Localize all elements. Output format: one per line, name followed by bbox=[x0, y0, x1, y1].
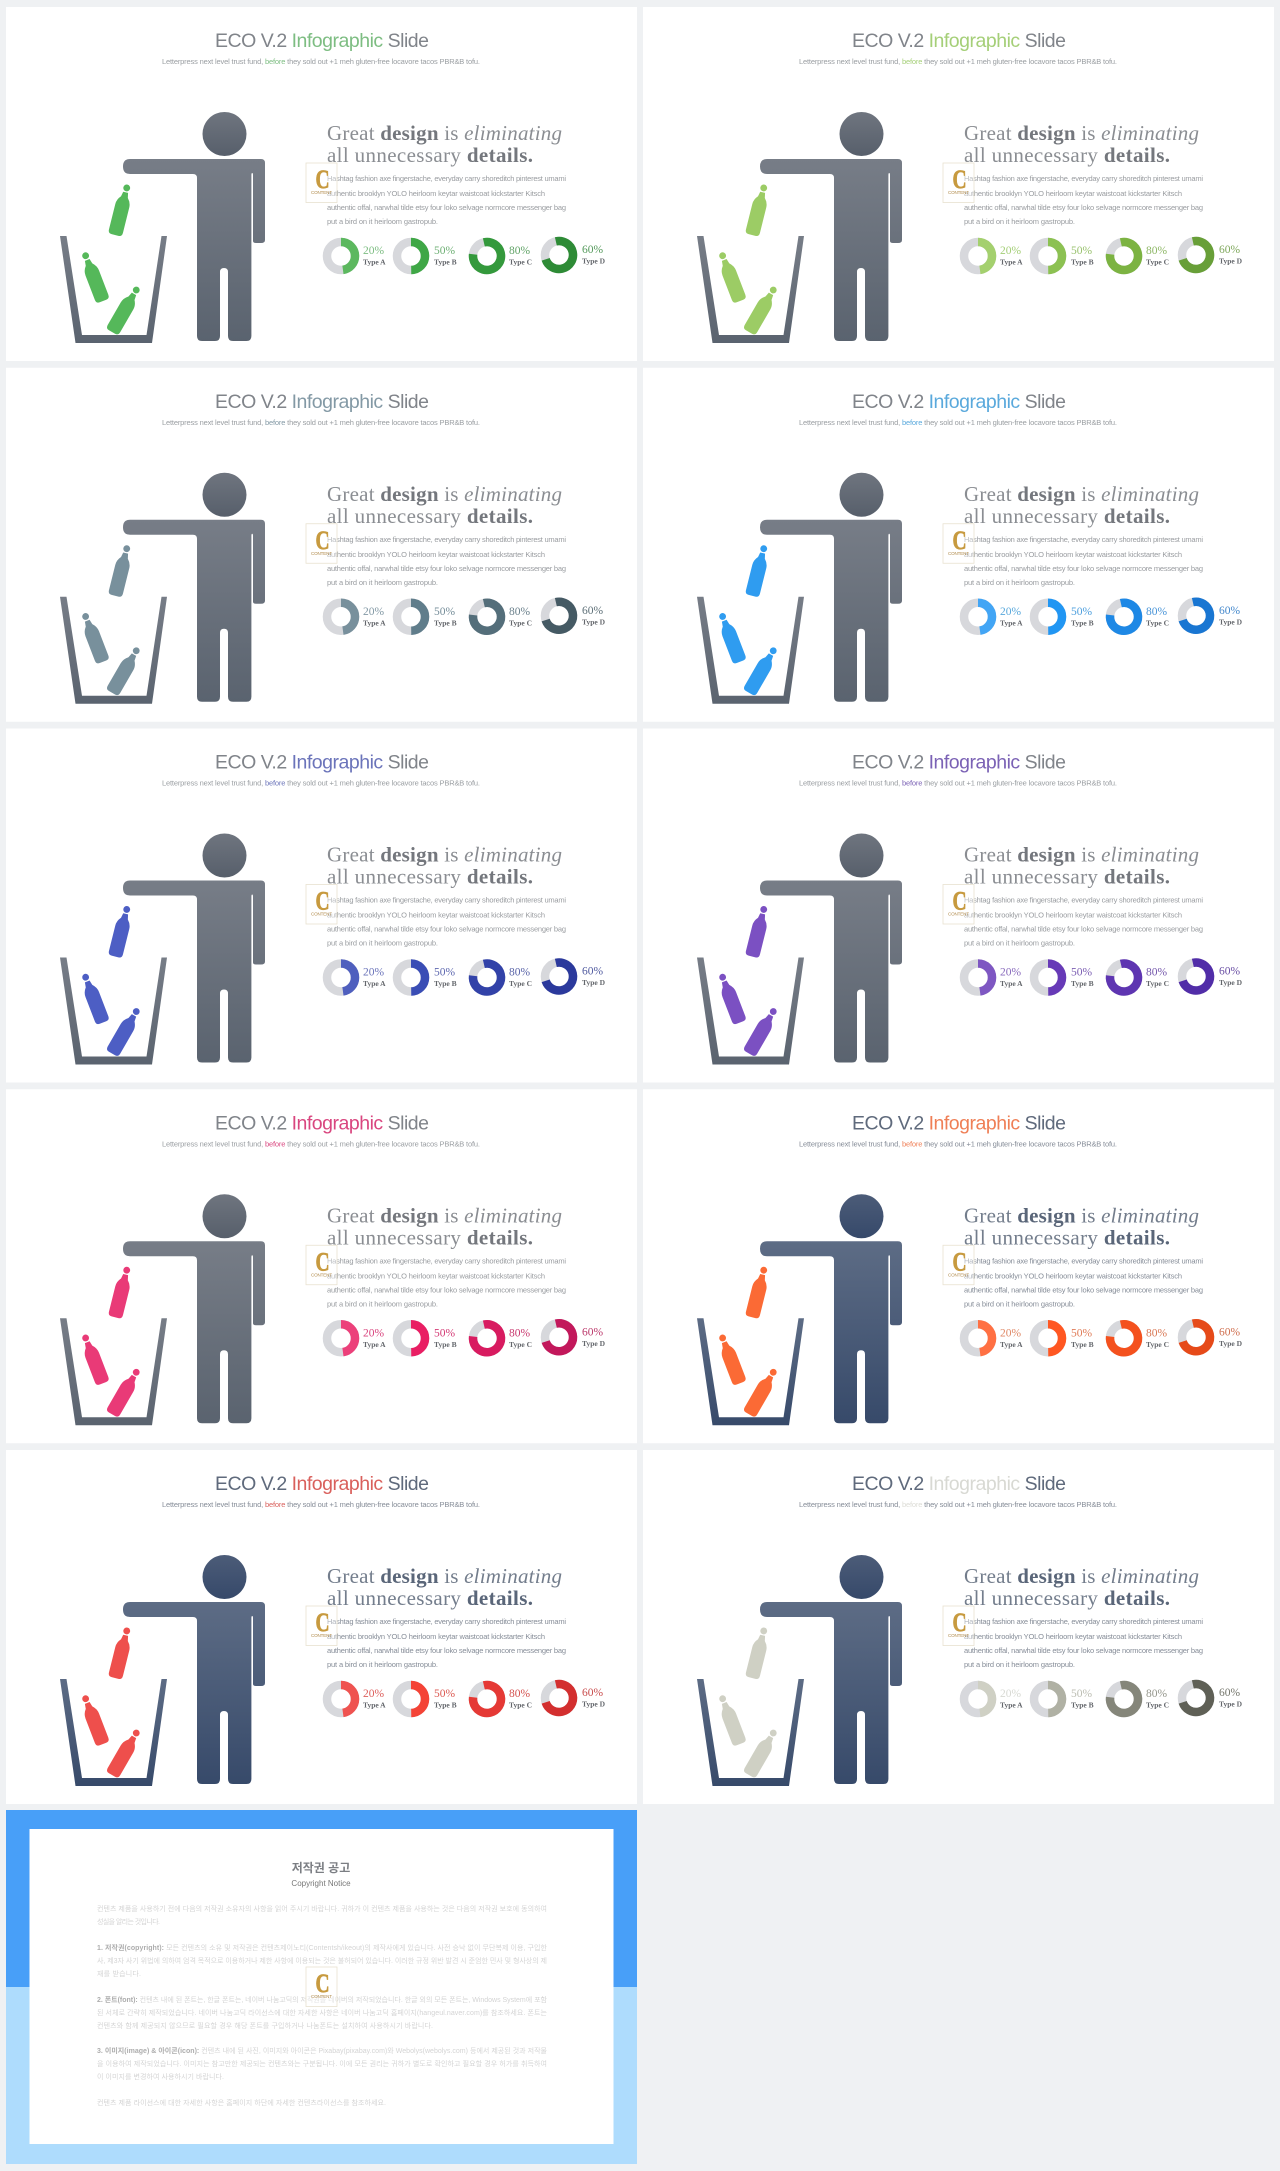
body text: authentic offal, narwhal tilde etsy four loko selvage normcore messenger bag bbox=[964, 924, 1203, 934]
donut: type D bbox=[1179, 1320, 1243, 1354]
body text: Hashtag fashion axe fingerstache, everyday carry shoreditch pinterest umami bbox=[964, 174, 1203, 183]
body text: put a bird on it heirloom gastropub. bbox=[964, 1660, 1075, 1669]
watermark bbox=[306, 1606, 337, 1646]
donut: type D: 60% bbox=[1219, 1326, 1240, 1338]
donut: type D: 60% bbox=[582, 244, 604, 256]
donut: type B bbox=[1034, 603, 1094, 631]
title: ECO V.2 Infographic Slide bbox=[215, 1473, 429, 1495]
notice text: 을 이용하여 제작되었습니다. 이미지는 참고만한 제공되는 컨텐츠와는 구분됩니다. 이에 모든 권리는 귀하가 별도로 확인하고 필요할 경우 허가를 취득하여 bbox=[97, 2059, 547, 2068]
donut: type A: 20% bbox=[1000, 1688, 1022, 1700]
donut: type B bbox=[1034, 964, 1094, 992]
icon: person throwing bottles in bin bbox=[60, 473, 265, 704]
body text bbox=[964, 174, 1203, 226]
watermark bbox=[306, 524, 337, 563]
donut: type A: 20% bbox=[1000, 1327, 1022, 1339]
donut: type B: Type B bbox=[1071, 979, 1094, 988]
donut: type A bbox=[964, 1324, 1023, 1352]
donut: type A: Type A bbox=[363, 979, 386, 988]
donut charts bbox=[327, 1681, 606, 1716]
subtitle: Letterpress next level trust fund, before they sold out +1 meh gluten-free locavore tacos PBR&B tofu. bbox=[162, 1500, 480, 1509]
body text: authentic offal, narwhal tilde etsy four loko selvage normcore messenger bag bbox=[327, 1646, 566, 1655]
donut: type D bbox=[1179, 1681, 1243, 1715]
body text: put a bird on it heirloom gastropub. bbox=[327, 1299, 438, 1308]
donut: type C: Type C bbox=[509, 618, 532, 627]
body text: authentic offal, narwhal tilde etsy four loko selvage normcore messenger bag bbox=[327, 564, 566, 573]
panel: purple slide bbox=[643, 728, 1274, 1082]
body text: authentic brooklyn YOLO heirloom keytar waistcoat kickstarter Kitsch bbox=[964, 189, 1182, 198]
watermark: CONTENT bbox=[948, 912, 969, 916]
body text bbox=[327, 1256, 566, 1308]
watermark: C bbox=[316, 526, 330, 554]
donut: type D: 60% bbox=[582, 1326, 604, 1338]
icon: person throwing bottles in bin bbox=[697, 1555, 902, 1786]
body text: Hashtag fashion axe fingerstache, everyday carry shoreditch pinterest umami bbox=[327, 1617, 566, 1626]
icon: person throwing bottles in bin bbox=[697, 834, 902, 1064]
donut: type D bbox=[542, 960, 606, 993]
headline: Great design is eliminating bbox=[964, 842, 1199, 866]
donut: type B: 50% bbox=[434, 966, 456, 978]
watermark: CONTENT bbox=[311, 1633, 332, 1638]
donut: type B: Type B bbox=[434, 258, 457, 266]
donut: type A bbox=[964, 1685, 1023, 1713]
donut: type A: 20% bbox=[363, 1688, 384, 1700]
panel: indigo slide bbox=[6, 728, 637, 1082]
panel: green slide bbox=[6, 7, 637, 361]
donut: type A: Type A bbox=[363, 1340, 386, 1349]
donut: type A: 20% bbox=[363, 966, 384, 978]
donut: type A: Type A bbox=[363, 258, 386, 266]
donut: type D bbox=[542, 599, 606, 633]
panel: pink slide bbox=[6, 1089, 637, 1443]
body text: authentic brooklyn YOLO heirloom keytar waistcoat kickstarter Kitsch bbox=[327, 1271, 545, 1280]
donut: type A: 20% bbox=[363, 245, 384, 257]
subtitle: Letterpress next level trust fund, before they sold out +1 meh gluten-free locavore tacos PBR&B tofu. bbox=[799, 778, 1117, 788]
donut: type B: 50% bbox=[434, 245, 456, 257]
donut: type C bbox=[1107, 961, 1169, 994]
headline: Great design is eliminating bbox=[964, 482, 1199, 506]
donut: type D: Type D bbox=[1219, 1700, 1243, 1708]
donut: type D: Type D bbox=[582, 1700, 606, 1708]
notice text: 사, 제3자 사기 위법에 의하여 엄격 목적으로 이용하거나 제한 사항에 이용되는 것은 불허되어 있습니다. 이러한 규정 위반 발견 시 준엄한 민사 및 형사상의 제 bbox=[97, 1956, 547, 1965]
notice text bbox=[97, 1904, 548, 2107]
notice text: 컨텐츠 제품 라이선스에 대한 자세한 사항은 홈페이지 하단에 자세한 컨텐츠라이선스를 참조하세요. bbox=[97, 2098, 386, 2107]
body text: Hashtag fashion axe fingerstache, everyday carry shoreditch pinterest umami bbox=[964, 535, 1203, 544]
watermark: C bbox=[316, 1608, 330, 1637]
donut: type B: Type B bbox=[1071, 618, 1094, 627]
donut: type A bbox=[327, 242, 386, 270]
donut: type B: 50% bbox=[1071, 966, 1092, 978]
body text: put a bird on it heirloom gastropub. bbox=[327, 578, 438, 587]
body text bbox=[327, 535, 566, 587]
body text: Hashtag fashion axe fingerstache, everyday carry shoreditch pinterest umami bbox=[964, 896, 1203, 904]
watermark bbox=[306, 1967, 337, 2006]
headline line 2: all unnecessary details. bbox=[964, 1225, 1170, 1249]
panel: red slide bbox=[6, 1450, 637, 1804]
donut: type C: 80% bbox=[1146, 245, 1168, 257]
donut: type A bbox=[327, 603, 386, 631]
subtitle: Letterpress next level trust fund, before they sold out +1 meh gluten-free locavore tacos PBR&B tofu. bbox=[799, 418, 1117, 427]
donut: type A bbox=[327, 1324, 386, 1352]
icon: person throwing bottles in bin bbox=[60, 1194, 265, 1425]
title: ECO V.2 Infographic Slide bbox=[852, 1112, 1066, 1134]
headline line 2: all unnecessary details. bbox=[327, 1586, 533, 1610]
donut: type B: 50% bbox=[434, 606, 456, 618]
watermark bbox=[306, 163, 337, 202]
watermark bbox=[943, 884, 974, 924]
watermark bbox=[306, 1245, 337, 1285]
donut charts bbox=[964, 599, 1243, 634]
donut: type C: Type C bbox=[509, 979, 532, 988]
headline line 2: all unnecessary details. bbox=[964, 1586, 1170, 1610]
body text bbox=[964, 1256, 1203, 1308]
donut: type A: Type A bbox=[363, 1700, 386, 1710]
donut: type D: Type D bbox=[1219, 978, 1243, 987]
donut: type D: 60% bbox=[582, 1687, 604, 1699]
subtitle: Letterpress next level trust fund, before they sold out +1 meh gluten-free locavore tacos PBR&B tofu. bbox=[799, 57, 1117, 66]
body text: authentic offal, narwhal tilde etsy four loko selvage normcore messenger bag bbox=[327, 1285, 566, 1294]
body text: put a bird on it heirloom gastropub. bbox=[327, 1660, 438, 1669]
body text: Hashtag fashion axe fingerstache, everyday carry shoreditch pinterest umami bbox=[327, 174, 566, 183]
donut: type D: Type D bbox=[1219, 617, 1243, 626]
watermark bbox=[943, 163, 974, 202]
watermark: CONTENT bbox=[311, 190, 332, 195]
donut charts bbox=[964, 960, 1243, 994]
donut: type A: 20% bbox=[1000, 966, 1022, 978]
donut: type A: 20% bbox=[363, 606, 384, 618]
donut: type C: 80% bbox=[509, 1327, 530, 1339]
body text: put a bird on it heirloom gastropub. bbox=[964, 217, 1075, 226]
watermark: CONTENT bbox=[311, 912, 332, 916]
watermark: C bbox=[952, 1248, 967, 1276]
body text: authentic offal, narwhal tilde etsy four loko selvage normcore messenger bag bbox=[327, 924, 566, 934]
notice title: 저작권 공고 bbox=[292, 1860, 350, 1875]
headline line 2: all unnecessary details. bbox=[327, 143, 533, 167]
notice text: 재를 받습니다. bbox=[97, 1969, 141, 1978]
panel: orange slide bbox=[643, 1089, 1274, 1443]
body text: Hashtag fashion axe fingerstache, everyday carry shoreditch pinterest umami bbox=[327, 1256, 566, 1265]
donut: type A: Type A bbox=[363, 618, 386, 627]
donut: type C: 80% bbox=[1146, 1688, 1168, 1700]
headline: Great design is eliminating bbox=[327, 842, 562, 866]
watermark: CONTENT bbox=[948, 1272, 969, 1277]
body text: Hashtag fashion axe fingerstache, everyday carry shoreditch pinterest umami bbox=[327, 535, 566, 544]
donut: type A: 20% bbox=[1000, 606, 1022, 618]
body text: Hashtag fashion axe fingerstache, everyday carry shoreditch pinterest umami bbox=[964, 1256, 1203, 1265]
headline: Great design is eliminating bbox=[327, 482, 562, 506]
panel: light green slide bbox=[643, 7, 1274, 361]
headline: Great design is eliminating bbox=[327, 121, 562, 145]
donut: type C bbox=[1107, 1321, 1169, 1355]
donut: type C: Type C bbox=[1146, 1700, 1169, 1710]
panel: copyright notice bbox=[6, 1810, 637, 2164]
headline: Great design is eliminating bbox=[964, 1203, 1199, 1227]
donut: type C bbox=[470, 1682, 532, 1716]
body text: authentic offal, narwhal tilde etsy four loko selvage normcore messenger bag bbox=[964, 1646, 1203, 1655]
donut: type C: 80% bbox=[509, 245, 530, 257]
donut: type B bbox=[1034, 242, 1094, 270]
notice text: 컨텐츠와 함께 제공되지 않으므로 필요할 경우 해당 폰트를 구입하거나 나눔폰트는 설치하여 사용하시기 바랍니다. bbox=[97, 2021, 433, 2030]
donut: type C: Type C bbox=[1146, 1340, 1169, 1349]
donut: type B: 50% bbox=[434, 1327, 456, 1339]
watermark: C bbox=[952, 887, 967, 915]
notice subtitle: Copyright Notice bbox=[291, 1879, 351, 1888]
donut: type A: 20% bbox=[363, 1327, 384, 1339]
body text: authentic brooklyn YOLO heirloom keytar waistcoat kickstarter Kitsch bbox=[964, 910, 1182, 920]
watermark bbox=[943, 1606, 974, 1646]
donut: type B: 50% bbox=[434, 1688, 456, 1700]
title: ECO V.2 Infographic Slide bbox=[215, 391, 429, 413]
donut charts bbox=[327, 238, 606, 273]
donut: type C bbox=[470, 1321, 532, 1355]
icon: person throwing bottles in bin bbox=[697, 473, 902, 704]
donut: type B: 50% bbox=[1071, 606, 1092, 618]
body text bbox=[964, 896, 1203, 948]
watermark: C bbox=[952, 1608, 967, 1637]
donut: type D: Type D bbox=[582, 1339, 606, 1348]
donut: type C bbox=[470, 961, 532, 994]
body text: put a bird on it heirloom gastropub. bbox=[964, 1299, 1075, 1308]
donut: type D: Type D bbox=[1219, 256, 1243, 266]
donut: type A bbox=[964, 603, 1023, 631]
body text bbox=[964, 535, 1203, 587]
body text bbox=[327, 1617, 566, 1669]
donut: type B: Type B bbox=[434, 1700, 457, 1710]
donut charts bbox=[964, 1681, 1243, 1716]
body text: authentic brooklyn YOLO heirloom keytar waistcoat kickstarter Kitsch bbox=[327, 189, 545, 198]
donut: type D: Type D bbox=[582, 256, 606, 266]
donut: type B: 50% bbox=[1071, 1327, 1092, 1339]
title: ECO V.2 Infographic Slide bbox=[215, 30, 429, 52]
headline: Great design is eliminating bbox=[964, 121, 1199, 145]
subtitle: Letterpress next level trust fund, before they sold out +1 meh gluten-free locavore tacos PBR&B tofu. bbox=[162, 1139, 480, 1148]
body text: authentic brooklyn YOLO heirloom keytar waistcoat kickstarter Kitsch bbox=[327, 550, 545, 559]
notice text: 성실을 알리는 것입니다. bbox=[97, 1917, 160, 1926]
donut: type B bbox=[397, 1685, 457, 1713]
body text: put a bird on it heirloom gastropub. bbox=[327, 217, 438, 226]
icon: person throwing bottles in bin bbox=[697, 1194, 902, 1425]
watermark: C bbox=[316, 1248, 330, 1276]
donut: type B bbox=[397, 242, 457, 270]
title: ECO V.2 Infographic Slide bbox=[215, 1112, 429, 1134]
watermark: CONTENT bbox=[311, 551, 332, 556]
donut: type D: 60% bbox=[582, 966, 604, 978]
watermark: CONTENT bbox=[948, 1633, 969, 1638]
donut: type A bbox=[327, 964, 386, 992]
subtitle: Letterpress next level trust fund, before they sold out +1 meh gluten-free locavore tacos PBR&B tofu. bbox=[162, 418, 480, 427]
donut: type A bbox=[964, 242, 1023, 270]
panel: neutral gray slide bbox=[643, 1450, 1274, 1804]
donut: type D: 60% bbox=[1219, 966, 1240, 978]
notice text: 3. 이미지(image) & 아이콘(icon): 컨텐츠 내에 된 사진, 이미지와 아이콘은 Pixabay(pixabay.com)와 Webolys(webolys.com) 등에서 제공된 것과 저작물 bbox=[97, 2046, 548, 2055]
donut: type B: Type B bbox=[434, 1340, 457, 1349]
donut: type A: Type A bbox=[1000, 1700, 1023, 1710]
donut: type D: 60% bbox=[582, 605, 604, 617]
donut: type A: 20% bbox=[1000, 245, 1022, 257]
donut: type A bbox=[964, 964, 1023, 992]
donut: type B bbox=[397, 964, 457, 992]
donut charts bbox=[964, 1320, 1243, 1355]
donut: type D bbox=[542, 238, 606, 272]
icon: person throwing bottles in bin bbox=[60, 112, 265, 343]
headline line 2: all unnecessary details. bbox=[964, 864, 1170, 888]
icon: person throwing bottles in bin bbox=[697, 112, 902, 343]
donut charts bbox=[327, 960, 606, 994]
watermark bbox=[306, 884, 337, 924]
watermark: C bbox=[316, 165, 330, 194]
donut: type C: 80% bbox=[1146, 966, 1168, 978]
donut: type C: 80% bbox=[509, 966, 530, 978]
notice text: 된 서체로 간략히 제작되었습니다. 네이버 나눔고딕 라이선스에 대한 자세한 사항은 네이버 나눔고딕 홈페이지(hangeul.naver.com)를 참조하세요. 폰트는 bbox=[97, 2008, 548, 2017]
donut: type B bbox=[397, 603, 457, 631]
donut: type C: Type C bbox=[1146, 979, 1169, 988]
donut: type C bbox=[1107, 239, 1169, 273]
donut: type C bbox=[1107, 600, 1169, 634]
donut: type C: 80% bbox=[509, 1688, 530, 1700]
headline: Great design is eliminating bbox=[964, 1564, 1199, 1588]
donut: type C: Type C bbox=[1146, 618, 1169, 627]
donut: type A: Type A bbox=[1000, 618, 1023, 627]
donut: type D: Type D bbox=[582, 978, 606, 987]
watermark: CONTENT bbox=[311, 1994, 332, 1999]
body text: put a bird on it heirloom gastropub. bbox=[964, 578, 1075, 587]
donut: type C: 80% bbox=[1146, 1327, 1168, 1339]
body text: authentic brooklyn YOLO heirloom keytar waistcoat kickstarter Kitsch bbox=[327, 910, 545, 920]
donut: type B: 50% bbox=[1071, 245, 1092, 257]
subtitle: Letterpress next level trust fund, before they sold out +1 meh gluten-free locavore tacos PBR&B tofu. bbox=[799, 1139, 1117, 1148]
body text: put a bird on it heirloom gastropub. bbox=[327, 938, 438, 948]
donut: type C bbox=[1107, 1682, 1169, 1716]
donut: type D bbox=[542, 1320, 606, 1354]
donut charts bbox=[964, 238, 1243, 273]
body text: Hashtag fashion axe fingerstache, everyday carry shoreditch pinterest umami bbox=[964, 1617, 1203, 1626]
donut: type D: Type D bbox=[582, 617, 606, 626]
body text: authentic offal, narwhal tilde etsy four loko selvage normcore messenger bag bbox=[327, 203, 566, 212]
body text: put a bird on it heirloom gastropub. bbox=[964, 938, 1075, 948]
headline line 2: all unnecessary details. bbox=[327, 1225, 533, 1249]
watermark bbox=[943, 1245, 974, 1285]
notice text: 컨텐츠 제품을 사용하기 전에 다음의 저작권 소유자의 사항을 읽어 주시기 바랍니다. 귀하가 이 컨텐츠 제품을 사용하는 것은 다음의 저작권 보호에 동의하여 bbox=[97, 1904, 547, 1913]
donut: type D bbox=[1179, 599, 1243, 633]
donut: type D bbox=[1179, 238, 1243, 272]
watermark bbox=[943, 524, 974, 563]
donut: type C: Type C bbox=[509, 258, 532, 266]
title: ECO V.2 Infographic Slide bbox=[852, 1473, 1066, 1495]
title: ECO V.2 Infographic Slide bbox=[852, 30, 1066, 52]
watermark: C bbox=[316, 887, 330, 915]
body text: authentic offal, narwhal tilde etsy four loko selvage normcore messenger bag bbox=[964, 564, 1203, 573]
body text: authentic brooklyn YOLO heirloom keytar waistcoat kickstarter Kitsch bbox=[964, 550, 1182, 559]
watermark: C bbox=[952, 526, 967, 554]
subtitle: Letterpress next level trust fund, before they sold out +1 meh gluten-free locavore tacos PBR&B tofu. bbox=[799, 1500, 1117, 1509]
donut: type B bbox=[1034, 1685, 1094, 1713]
donut: type D: 60% bbox=[1219, 1687, 1240, 1699]
notice text: 2. 폰트(font): 컨텐츠 내에 된 폰트는, 한글 폰트는, 네이버 나눔고딕의 저작권을 네이버의 저작되었습니다. 한글 외의 모든 폰트는, Windows System에 포함 bbox=[97, 1995, 548, 2004]
donut: type B bbox=[1034, 1324, 1094, 1352]
notice text: 이 이미지를 변경하여 사용하시기 바랍니다. bbox=[97, 2072, 224, 2081]
body text bbox=[327, 896, 566, 948]
subtitle: Letterpress next level trust fund, before they sold out +1 meh gluten-free locavore tacos PBR&B tofu. bbox=[162, 57, 480, 66]
icon: person throwing bottles in bin bbox=[60, 1555, 265, 1786]
body text: authentic offal, narwhal tilde etsy four loko selvage normcore messenger bag bbox=[964, 1285, 1203, 1294]
donut: type B: Type B bbox=[1071, 258, 1094, 266]
donut: type D: Type D bbox=[1219, 1339, 1243, 1348]
icon: person throwing bottles in bin bbox=[60, 834, 265, 1064]
headline: Great design is eliminating bbox=[327, 1564, 562, 1588]
watermark: CONTENT bbox=[948, 190, 969, 195]
donut: type C bbox=[470, 239, 532, 273]
watermark: CONTENT bbox=[948, 551, 969, 556]
donut: type B: 50% bbox=[1071, 1688, 1092, 1700]
headline line 2: all unnecessary details. bbox=[327, 864, 533, 888]
body text bbox=[327, 174, 566, 226]
donut: type C: 80% bbox=[1146, 606, 1168, 618]
donut: type A: Type A bbox=[1000, 979, 1023, 988]
donut charts bbox=[327, 1320, 606, 1355]
donut: type B: Type B bbox=[434, 618, 457, 627]
subtitle: Letterpress next level trust fund, before they sold out +1 meh gluten-free locavore tacos PBR&B tofu. bbox=[162, 778, 480, 788]
donut: type D: 60% bbox=[1219, 605, 1240, 617]
donut: type C: Type C bbox=[509, 1340, 532, 1349]
headline: Great design is eliminating bbox=[327, 1203, 562, 1227]
title: ECO V.2 Infographic Slide bbox=[215, 752, 429, 774]
body text: Hashtag fashion axe fingerstache, everyday carry shoreditch pinterest umami bbox=[327, 896, 566, 904]
donut: type C: 80% bbox=[509, 606, 530, 618]
body text bbox=[964, 1617, 1203, 1669]
donut: type A: Type A bbox=[1000, 1340, 1023, 1349]
donut: type B: Type B bbox=[1071, 1340, 1094, 1349]
body text: authentic brooklyn YOLO heirloom keytar waistcoat kickstarter Kitsch bbox=[964, 1632, 1182, 1641]
title: ECO V.2 Infographic Slide bbox=[852, 752, 1066, 774]
body text: authentic brooklyn YOLO heirloom keytar waistcoat kickstarter Kitsch bbox=[327, 1632, 545, 1641]
donut: type A: Type A bbox=[1000, 258, 1023, 266]
donut: type B: Type B bbox=[434, 979, 457, 988]
donut: type B: Type B bbox=[1071, 1700, 1094, 1710]
watermark: CONTENT bbox=[311, 1272, 332, 1277]
donut: type D bbox=[542, 1681, 606, 1715]
donut: type D bbox=[1179, 960, 1243, 993]
donut charts bbox=[327, 599, 606, 634]
panel: blue-gray slide bbox=[6, 368, 637, 722]
donut: type B bbox=[397, 1324, 457, 1352]
notice text: 1. 저작권(copyright): 모든 컨텐츠의 소유 및 저작권은 컨텐츠제이노티(Contentsh/ikeout)의 제작사에게 있습니다. 사전 승낙 없이 무단복제 이용, 구입한 bbox=[97, 1943, 548, 1952]
body text: authentic offal, narwhal tilde etsy four loko selvage normcore messenger bag bbox=[964, 203, 1203, 212]
donut: type C: Type C bbox=[1146, 258, 1169, 266]
donut: type A bbox=[327, 1685, 386, 1713]
panel: blue slide bbox=[643, 368, 1274, 722]
donut: type C: Type C bbox=[509, 1700, 532, 1710]
title: ECO V.2 Infographic Slide bbox=[852, 391, 1066, 413]
donut: type D: 60% bbox=[1219, 244, 1240, 256]
headline line 2: all unnecessary details. bbox=[964, 504, 1170, 528]
headline line 2: all unnecessary details. bbox=[327, 504, 533, 528]
donut: type C bbox=[470, 600, 532, 634]
watermark: C bbox=[316, 1969, 330, 1998]
headline line 2: all unnecessary details. bbox=[964, 143, 1170, 167]
watermark: C bbox=[952, 165, 967, 194]
body text: authentic brooklyn YOLO heirloom keytar waistcoat kickstarter Kitsch bbox=[964, 1271, 1182, 1280]
